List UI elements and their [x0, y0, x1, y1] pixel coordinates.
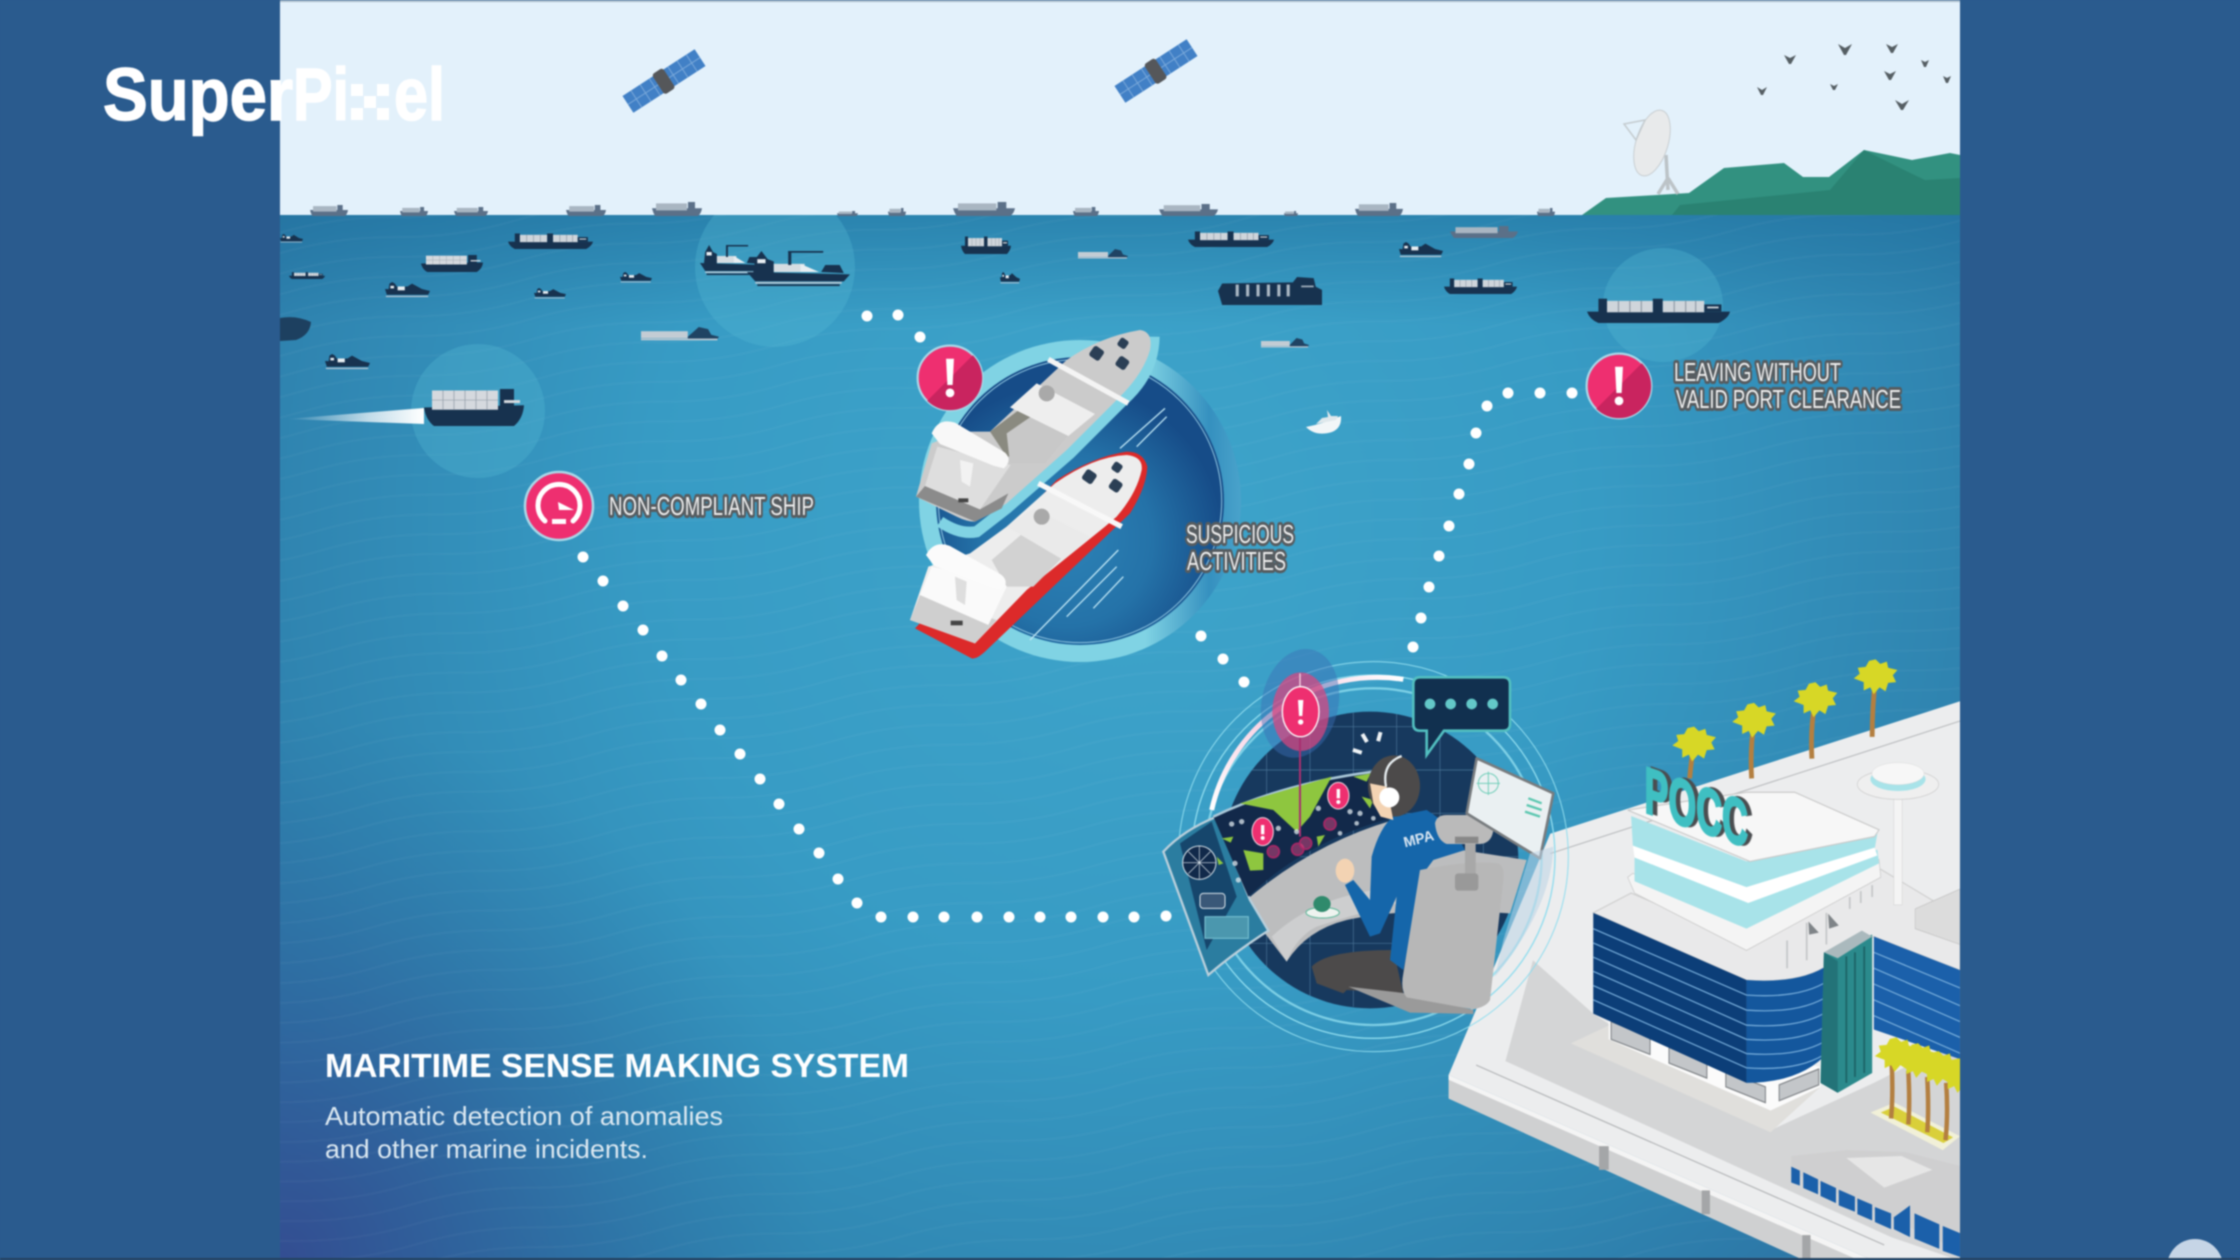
icon: speed gauge alert [525, 472, 593, 540]
description [325, 1101, 723, 1164]
highlight circles [411, 187, 1723, 478]
entrance pad [1571, 1026, 1821, 1132]
sky [280, 0, 1960, 216]
alert icon: leaving without clearance [1587, 354, 1651, 418]
rooftop unit [1915, 889, 1960, 944]
speech bubble [1413, 677, 1510, 755]
far palms [1672, 659, 1897, 778]
POCC sign: POCC [1645, 754, 1748, 862]
label: leaving without valid port clearance: VALID PORT CLEARANCE [1676, 384, 1901, 414]
operator in MPA uniform: MPA [1402, 828, 1436, 851]
grey ship [916, 330, 1154, 532]
horizon ships [310, 202, 1555, 216]
label: suspicious activities [1186, 519, 1294, 576]
label: leaving without valid port clearance: LEAVING WITHOUT [1674, 357, 1841, 387]
suspicious activities vignette [910, 330, 1241, 662]
dotted route: suspicious activities [862, 310, 1250, 688]
satellite left [621, 48, 707, 114]
yacht [1306, 410, 1341, 434]
dotted route: non-compliant ship to control centre [578, 552, 1172, 922]
dark grid backdrop [1231, 710, 1520, 1010]
label: suspicious activities: SUSPICIOUS [1186, 519, 1294, 549]
dotted route: leaving without clearance [1408, 388, 1578, 652]
terminal roof with blue windows [1791, 1150, 1960, 1257]
satellite dish [1624, 106, 1678, 194]
quay [1449, 701, 1984, 1260]
teal tower [1821, 931, 1872, 1093]
description: Automatic detection of anomalies [325, 1101, 723, 1131]
scan beam over quay [1495, 847, 1553, 977]
label: non-compliant ship: NON-COMPLIANT SHIP [609, 491, 814, 521]
blue facade [1593, 913, 1960, 1083]
label: leaving without valid port clearance [1674, 357, 1901, 414]
chair [1348, 815, 1504, 1014]
birds [1757, 44, 1951, 110]
sea [280, 215, 1960, 1260]
upper deck [1593, 869, 1960, 981]
planter with palms [1871, 1036, 1961, 1150]
logo: Pi [293, 53, 349, 136]
attention marks [1352, 732, 1382, 755]
green button [1306, 896, 1339, 918]
selected non-compliant ship with wake [286, 389, 524, 426]
land with POCC building [1449, 659, 1984, 1260]
operator vignette [1163, 642, 1568, 1052]
heading: MARITIME SENSE MAKING SYSTEM [325, 1047, 909, 1084]
glass tiers [1628, 792, 1881, 950]
wall map screen [1163, 772, 1397, 975]
logo [103, 53, 445, 136]
radar tower [1857, 763, 1939, 905]
hills [1582, 150, 1960, 215]
alert icon: suspicious activities [918, 346, 982, 410]
label: suspicious activities: ACTIVITIES [1187, 546, 1286, 576]
scanner rings [1178, 662, 1568, 1052]
console desk [1248, 820, 1527, 962]
ground floor with windows [1609, 1020, 1821, 1111]
flags [1787, 885, 1872, 968]
satellite right [1113, 38, 1199, 104]
operator in MPA uniform [1312, 755, 1465, 993]
tablet [1467, 758, 1553, 858]
bottom-right round marker [2167, 1239, 2223, 1260]
fleet of ships [280, 226, 1730, 369]
logo: Super [103, 53, 293, 136]
red ship [910, 452, 1147, 658]
main alert beacon [1251, 642, 1349, 837]
logo: el [394, 53, 445, 136]
disc with ring [919, 340, 1241, 662]
description: and other marine incidents. [325, 1134, 648, 1164]
